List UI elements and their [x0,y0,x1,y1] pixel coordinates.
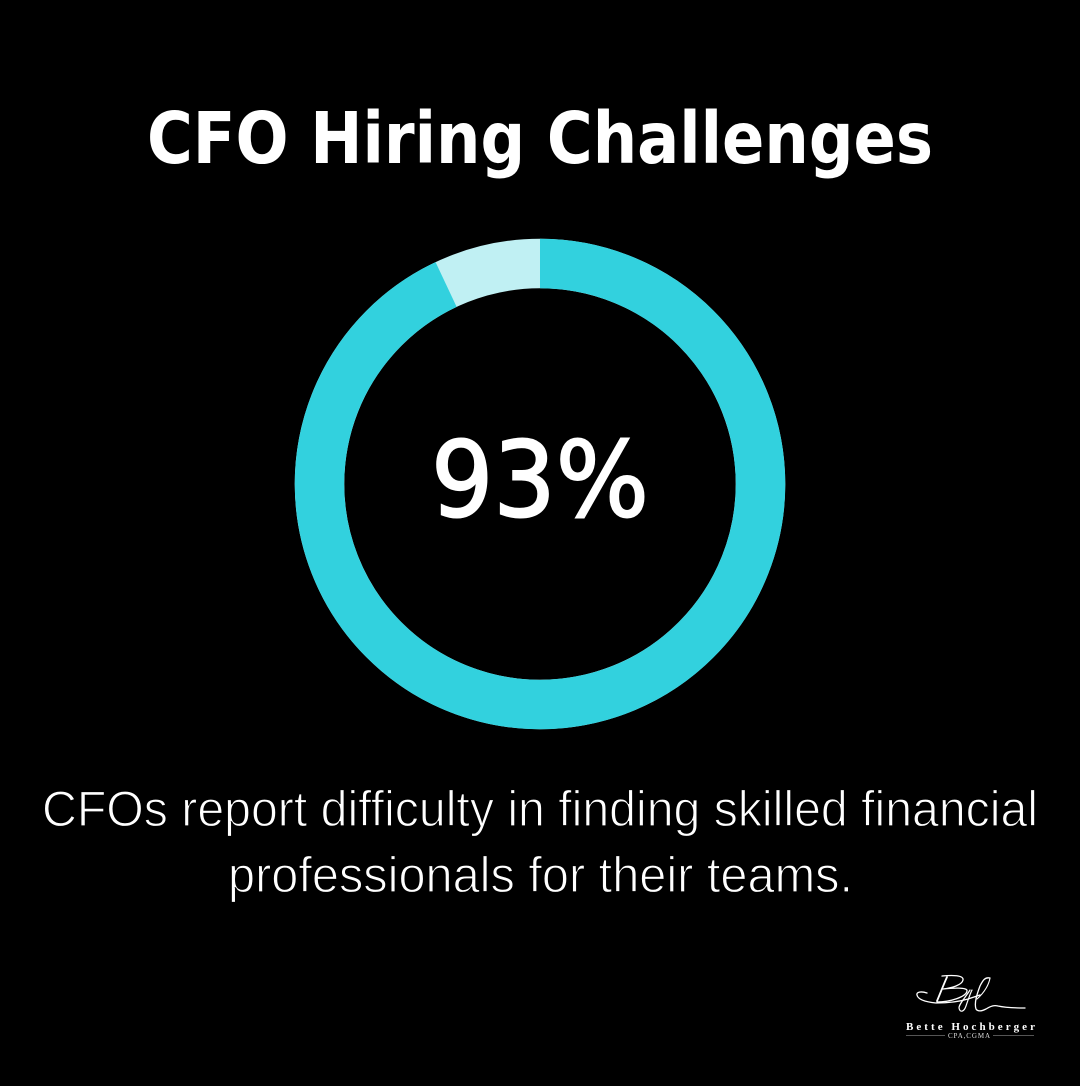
description text: professionals for their teams. [228,847,853,903]
description text [42,781,1038,903]
description text: CFOs report difficulty in finding skilled financial [42,781,1038,837]
logo credentials: CPA,CGMA [948,1032,990,1040]
donut chart: 93% [320,264,761,704]
donut track: remaining 7% [320,264,760,704]
donut segment: 93% [320,264,761,704]
logo: Bette Hochberger signature [906,975,1035,1040]
logo name: Bette Hochberger [906,1021,1035,1033]
title: CFO Hiring Challenges [147,97,933,180]
icon: BH signature [917,975,1025,1011]
center value: 93% [431,419,649,541]
